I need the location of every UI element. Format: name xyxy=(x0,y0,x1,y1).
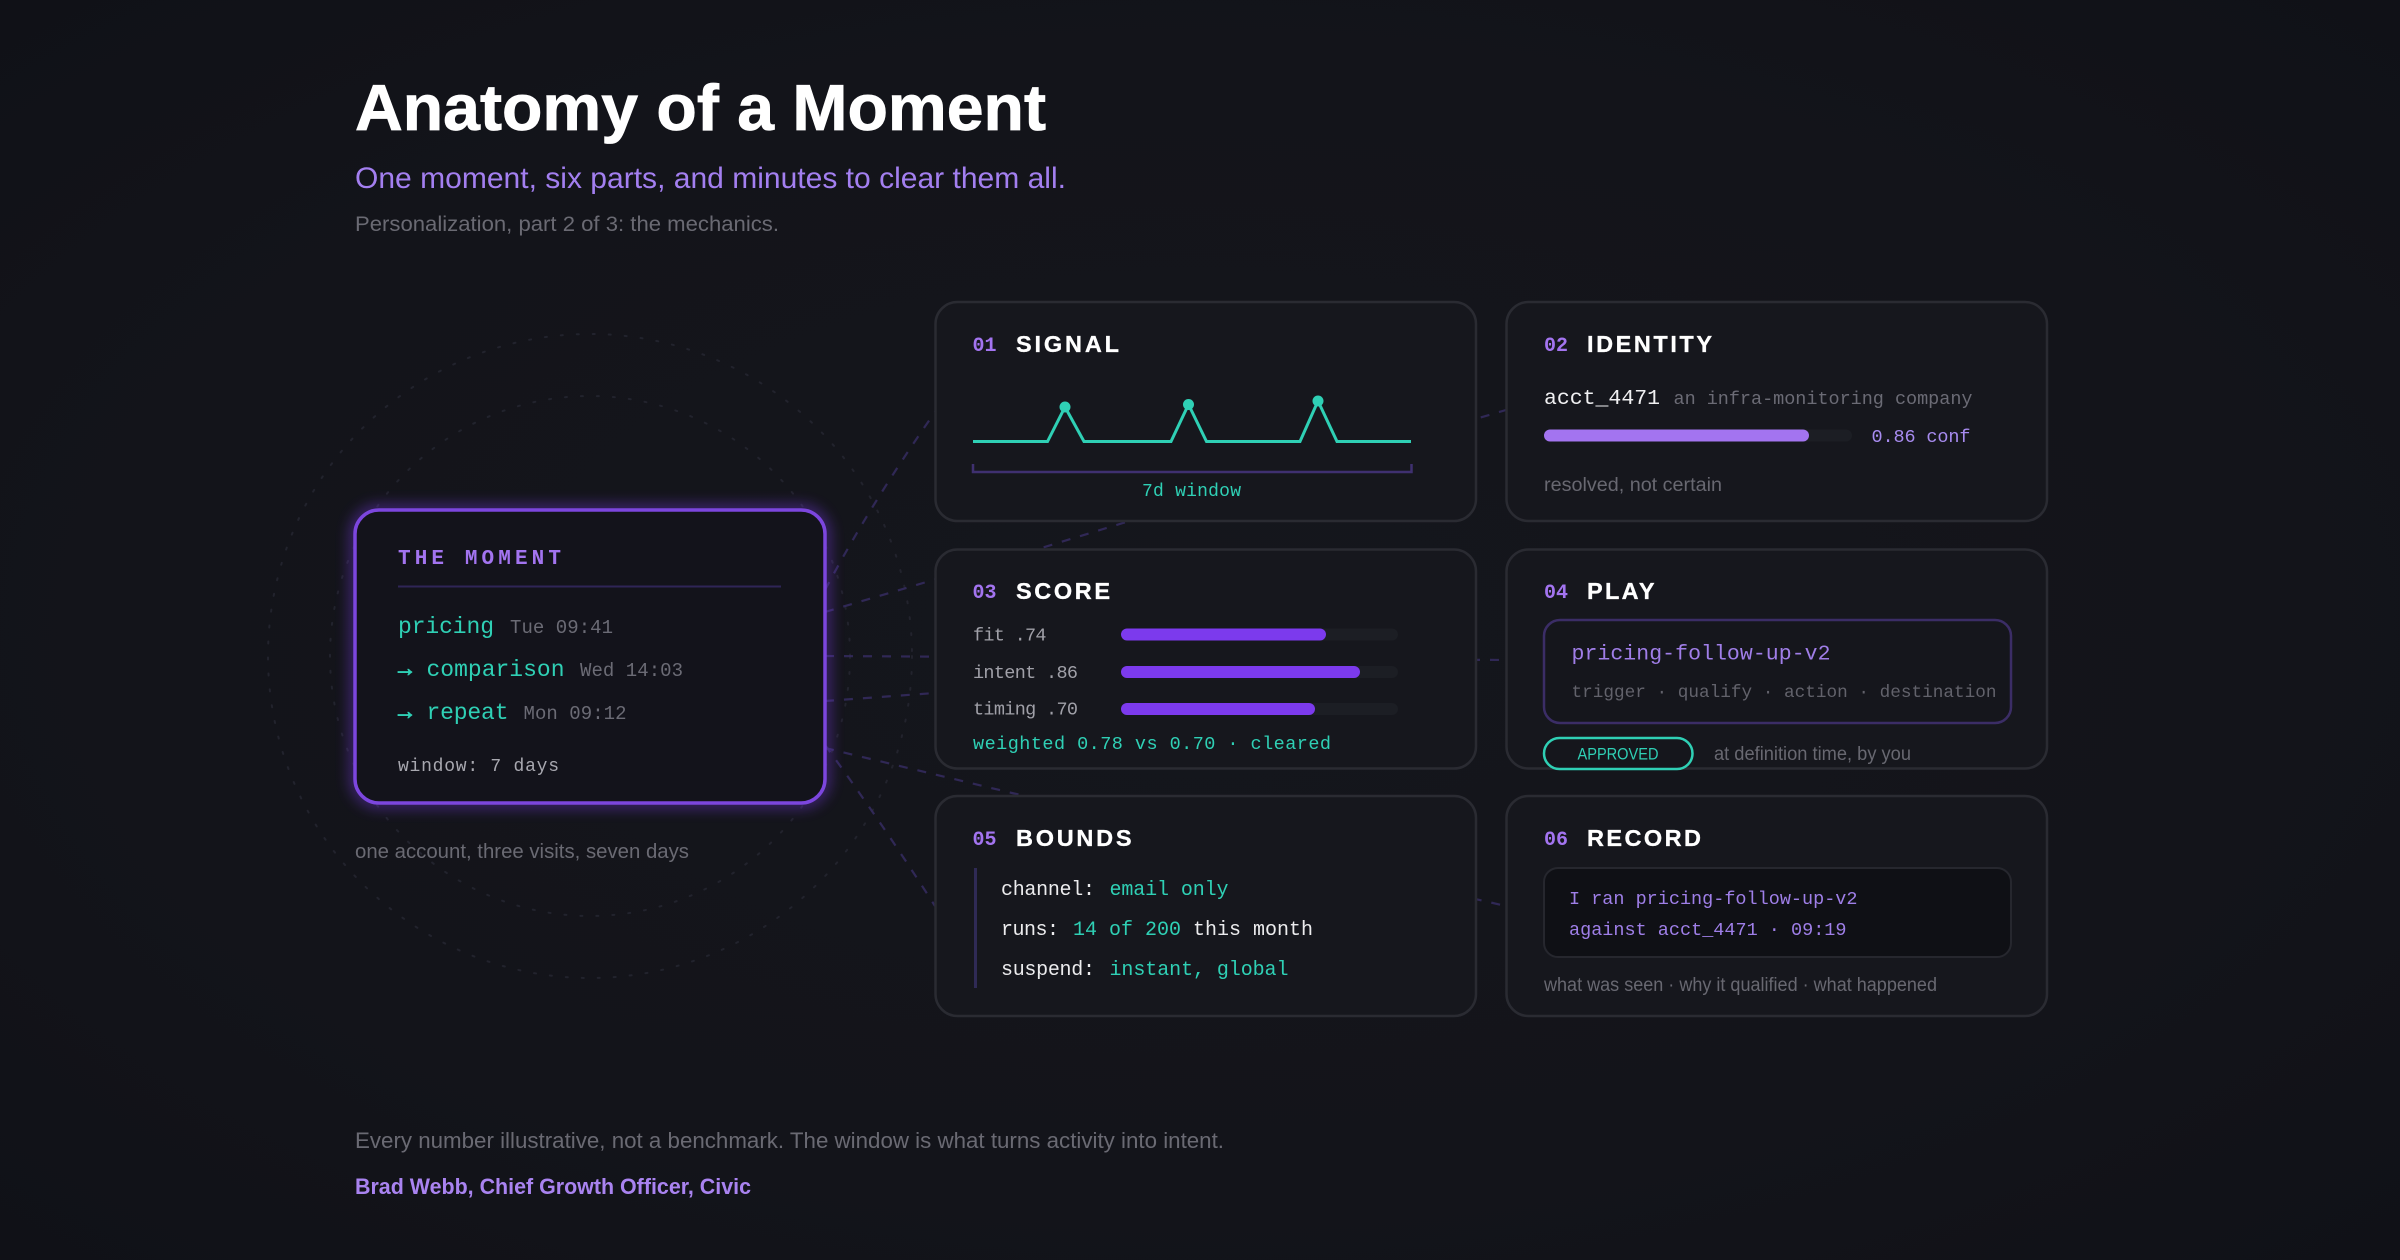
runs bound: 14 of 200 xyxy=(1073,919,1181,942)
signal heading xyxy=(972,331,1119,358)
record heading: 06 xyxy=(1544,829,1568,852)
runs bound xyxy=(1001,919,1313,942)
visit: repeat: repeat xyxy=(426,700,508,726)
record log box xyxy=(1544,868,2011,957)
suspend bound: suspend: xyxy=(1001,959,1095,982)
panel: 02 identity xyxy=(1506,302,2047,521)
approved pill xyxy=(1544,738,1692,769)
score heading xyxy=(972,578,1110,605)
play definition box xyxy=(1544,620,2011,723)
panel: 05 bounds xyxy=(936,796,1476,1016)
bounds heading: 05 xyxy=(972,829,996,852)
account line: acct_4471 xyxy=(1544,387,1660,411)
seven day bracket xyxy=(973,464,1412,472)
series note: Personalization, part 2 of 3: the mechanics. xyxy=(355,212,779,236)
record heading: RECORD xyxy=(1587,825,1701,851)
score heading: 03 xyxy=(972,582,996,605)
play heading: PLAY xyxy=(1587,578,1655,604)
window length: window: 7 days xyxy=(398,757,559,777)
visit: comparison: comparison xyxy=(426,657,564,683)
runs bound: runs: xyxy=(1001,919,1059,942)
visit: pricing: pricing xyxy=(398,614,494,640)
weighted result: weighted 0.78 vs 0.70 · cleared xyxy=(973,734,1331,755)
visit: comparison: → xyxy=(398,657,412,683)
approved pill: APPROVED xyxy=(1578,744,1658,764)
dashed connectors from the moment to the six parts xyxy=(825,410,1506,906)
intent row: intent .86 xyxy=(973,663,1078,684)
visit: pricing: Tue 09:41 xyxy=(510,617,613,639)
score heading: SCORE xyxy=(1016,578,1110,604)
timing row: timing .70 xyxy=(973,700,1078,720)
channel bound: channel: xyxy=(1001,879,1095,902)
signal heading: 01 xyxy=(972,335,996,358)
subtitle: One moment, six parts, and minutes to clear them all. xyxy=(355,162,1066,195)
timing row xyxy=(973,700,1398,720)
footer disclaimer: Every number illustrative, not a benchmark. The window is what turns activity into intent. xyxy=(355,1128,1224,1153)
sparkline with three peaks xyxy=(973,396,1411,442)
channel bound: email only xyxy=(1110,879,1228,902)
identity heading: 02 xyxy=(1544,335,1568,358)
panel: 04 play xyxy=(1506,550,2047,769)
account line xyxy=(1544,387,1972,411)
confidence bar xyxy=(1544,427,1970,448)
play heading xyxy=(1544,578,1655,605)
visit: repeat: Mon 09:12 xyxy=(524,703,626,725)
moment label: THE MOMENT xyxy=(398,548,561,571)
visit: comparison xyxy=(398,657,683,683)
intent row xyxy=(973,663,1398,684)
bounds heading: BOUNDS xyxy=(1016,825,1132,851)
signal heading: SIGNAL xyxy=(1016,331,1119,357)
panel: 06 record xyxy=(1506,796,2047,1016)
identity note: resolved, not certain xyxy=(1544,475,1722,496)
visit: pricing xyxy=(398,614,613,640)
visit: repeat: → xyxy=(398,700,412,726)
identity heading: IDENTITY xyxy=(1587,331,1712,357)
runs bound: this month xyxy=(1193,919,1313,942)
panel: 01 signal xyxy=(936,302,1476,521)
approval note: at definition time, by you xyxy=(1714,744,1911,765)
fit row: fit .74 xyxy=(973,626,1046,646)
window label: 7d window xyxy=(1142,482,1241,502)
panel: 03 score xyxy=(936,550,1476,768)
channel bound xyxy=(1001,879,1228,902)
record note: what was seen · why it qualified · what happened xyxy=(1543,975,1937,996)
confidence bar: 0.86 conf xyxy=(1872,427,1970,448)
record heading xyxy=(1544,825,1701,852)
panel: the moment xyxy=(355,510,825,803)
play definition box: trigger · qualify · action · destination xyxy=(1572,683,1996,703)
visit: repeat xyxy=(398,700,626,726)
suspend bound xyxy=(1001,959,1288,982)
moment caption: one account, three visits, seven days xyxy=(355,840,689,863)
record log box: I ran pricing-follow-up-v2 xyxy=(1569,889,1858,910)
byline: Brad Webb, Chief Growth Officer, Civic xyxy=(355,1174,751,1199)
dotted orbit rings xyxy=(268,334,912,978)
account line: an infra-monitoring company xyxy=(1674,389,1972,410)
bounds heading xyxy=(972,825,1132,852)
play heading: 04 xyxy=(1544,582,1568,605)
play definition box: pricing-follow-up-v2 xyxy=(1572,642,1830,666)
fit row xyxy=(973,626,1398,646)
title: Anatomy of a Moment xyxy=(355,71,1046,144)
visit: comparison: Wed 14:03 xyxy=(580,660,683,682)
suspend bound: instant, global xyxy=(1110,959,1288,982)
record log box: against acct_4471 · 09:19 xyxy=(1569,920,1846,941)
